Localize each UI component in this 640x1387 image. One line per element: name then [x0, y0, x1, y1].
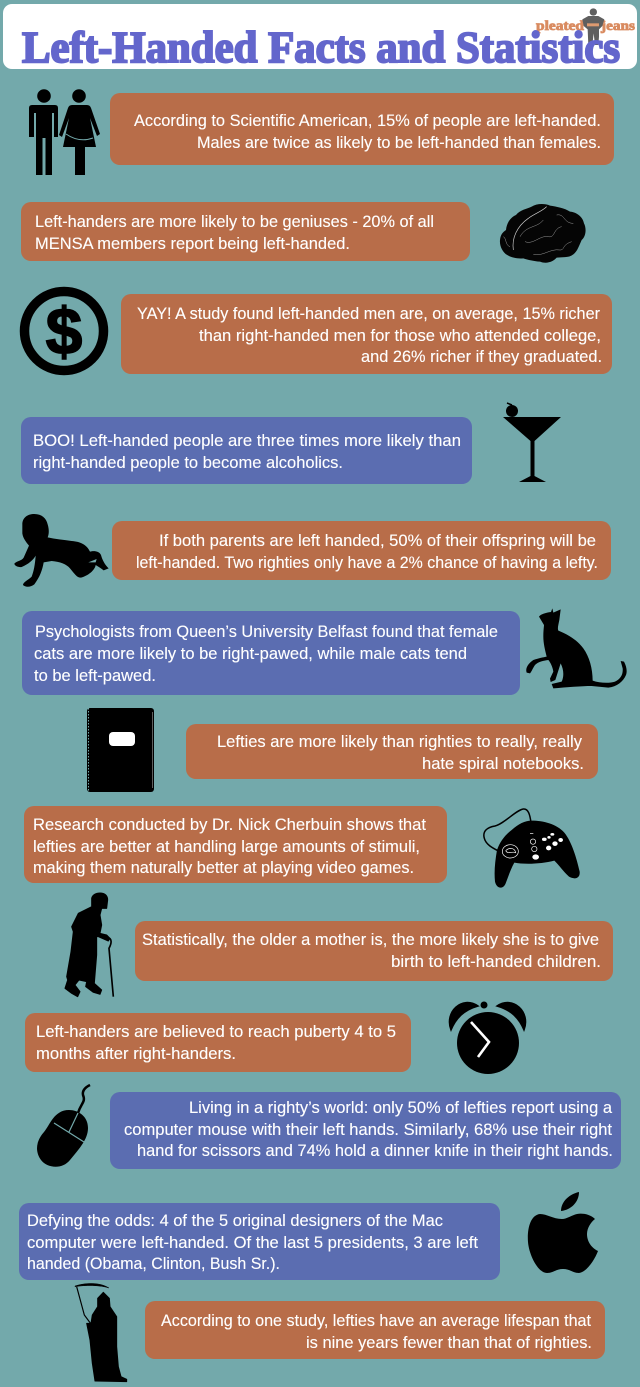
panel: Mac designers and presidents: handed (Obama, Clinton, Bush Sr.).	[27, 1254, 280, 1273]
panel: richer	[121, 294, 612, 374]
panel: 15% left-handed	[110, 93, 614, 165]
logo: pleated jeans: pleated	[536, 19, 584, 34]
panel: puberty	[25, 1013, 411, 1072]
panel: older mothers: birth to left-handed children.	[391, 952, 601, 971]
icon: martini glass	[503, 403, 561, 482]
logo: pleated jeans: jeans	[600, 19, 636, 34]
panel: video games: making them naturally better at playing video games.	[33, 858, 414, 877]
panel: geniuses: Left-handers are more likely to be geniuses - 20% of all	[35, 212, 434, 231]
panel: spiral notebooks: Lefties are more likely than righties to really, really	[217, 732, 582, 751]
panel: older mothers: Statistically, the older a mother is, the more likely she is to give	[142, 930, 599, 949]
header banner	[3, 4, 637, 72]
panel: 15% left-handed: According to Scientific American, 15% of people are left-handed.	[134, 111, 601, 130]
panel: cats: to be left-pawed.	[34, 666, 156, 685]
panel: Mac designers and presidents: Defying the odds: 4 of the 5 original designers of the Mac	[27, 1211, 443, 1230]
panel: spiral notebooks	[186, 724, 598, 779]
icon: apple	[528, 1192, 598, 1273]
icon: old woman with cane	[65, 893, 113, 997]
panel: righty's world: Living in a righty’s world: only 50% of lefties report using a	[189, 1098, 613, 1117]
icon: brain	[500, 204, 586, 263]
icon: alarm clock	[449, 1002, 526, 1074]
icon: cat	[526, 608, 627, 688]
icon: dollar coin: $	[46, 294, 82, 368]
panel: geniuses	[21, 202, 470, 261]
panel: alcoholics: BOO! Left-handed people are three times more likely than	[33, 431, 461, 450]
panel: parents: left-handed. Two righties only have a 2% chance of having a lefty.	[136, 553, 598, 572]
panel: spiral notebooks: hate spiral notebooks.	[422, 754, 584, 773]
icon: game controller	[484, 809, 580, 888]
panel: alcoholics	[21, 417, 472, 484]
panel: older mothers	[135, 921, 613, 981]
panel: video games	[24, 806, 447, 883]
icon: spiral notebook	[87, 708, 154, 792]
panel: Mac designers and presidents	[19, 1203, 500, 1280]
panel: parents	[112, 521, 611, 580]
panel: Mac designers and presidents: computer were left-handed. Of the last 5 presidents, 3 are left	[27, 1233, 478, 1252]
panel: cats: cats are more likely to be right-pawed, while male cats tend	[34, 644, 467, 663]
panel: lifespan: is nine years fewer than that of righties.	[306, 1333, 592, 1352]
panel: video games: lefties are better at handling large amounts of stimuli,	[33, 837, 420, 856]
icon: crawling baby	[14, 514, 109, 587]
icon: dollar coin	[24, 292, 104, 370]
panel: lifespan	[145, 1301, 605, 1359]
panel: cats: Psychologists from Queen’s University Belfast found that female	[35, 622, 498, 641]
panel: richer: and 26% richer if they graduated.	[361, 347, 602, 366]
panel: richer: than right-handed men for those who attended college,	[199, 326, 601, 345]
panel: parents: If both parents are left handed, 50% of their offspring will be	[159, 531, 596, 550]
icon: man and woman	[29, 89, 100, 175]
icon: grim reaper	[75, 1283, 127, 1382]
panel: 15% left-handed: Males are twice as likely to be left-handed than females.	[197, 133, 601, 152]
panel: alcoholics: right-handed people to become alcoholics.	[33, 453, 343, 472]
panel: cats	[22, 611, 520, 695]
panel: righty's world: computer mouse with their left hands. Similarly, 68% use their right	[124, 1120, 612, 1139]
logo: pleated jeans	[536, 8, 636, 45]
panel: video games: Research conducted by Dr. Nick Cherbuin shows that	[33, 815, 426, 834]
panel: righty's world: hand for scissors and 74% hold a dinner knife in their right hands.	[137, 1141, 613, 1160]
panel: richer: YAY! A study found left-handed men are, on average, 15% richer	[137, 304, 600, 323]
panel: puberty: months after right-handers.	[36, 1044, 236, 1063]
panel: righty's world	[110, 1092, 621, 1169]
panel: lifespan: According to one study, lefties have an average lifespan that	[161, 1311, 591, 1330]
title: Left-Handed Facts and Statistics	[22, 23, 620, 72]
icon: computer mouse	[37, 1085, 90, 1167]
panel: geniuses: MENSA members report being left-handed.	[35, 234, 350, 253]
panel: puberty: Left-handers are believed to reach puberty 4 to 5	[36, 1022, 396, 1041]
